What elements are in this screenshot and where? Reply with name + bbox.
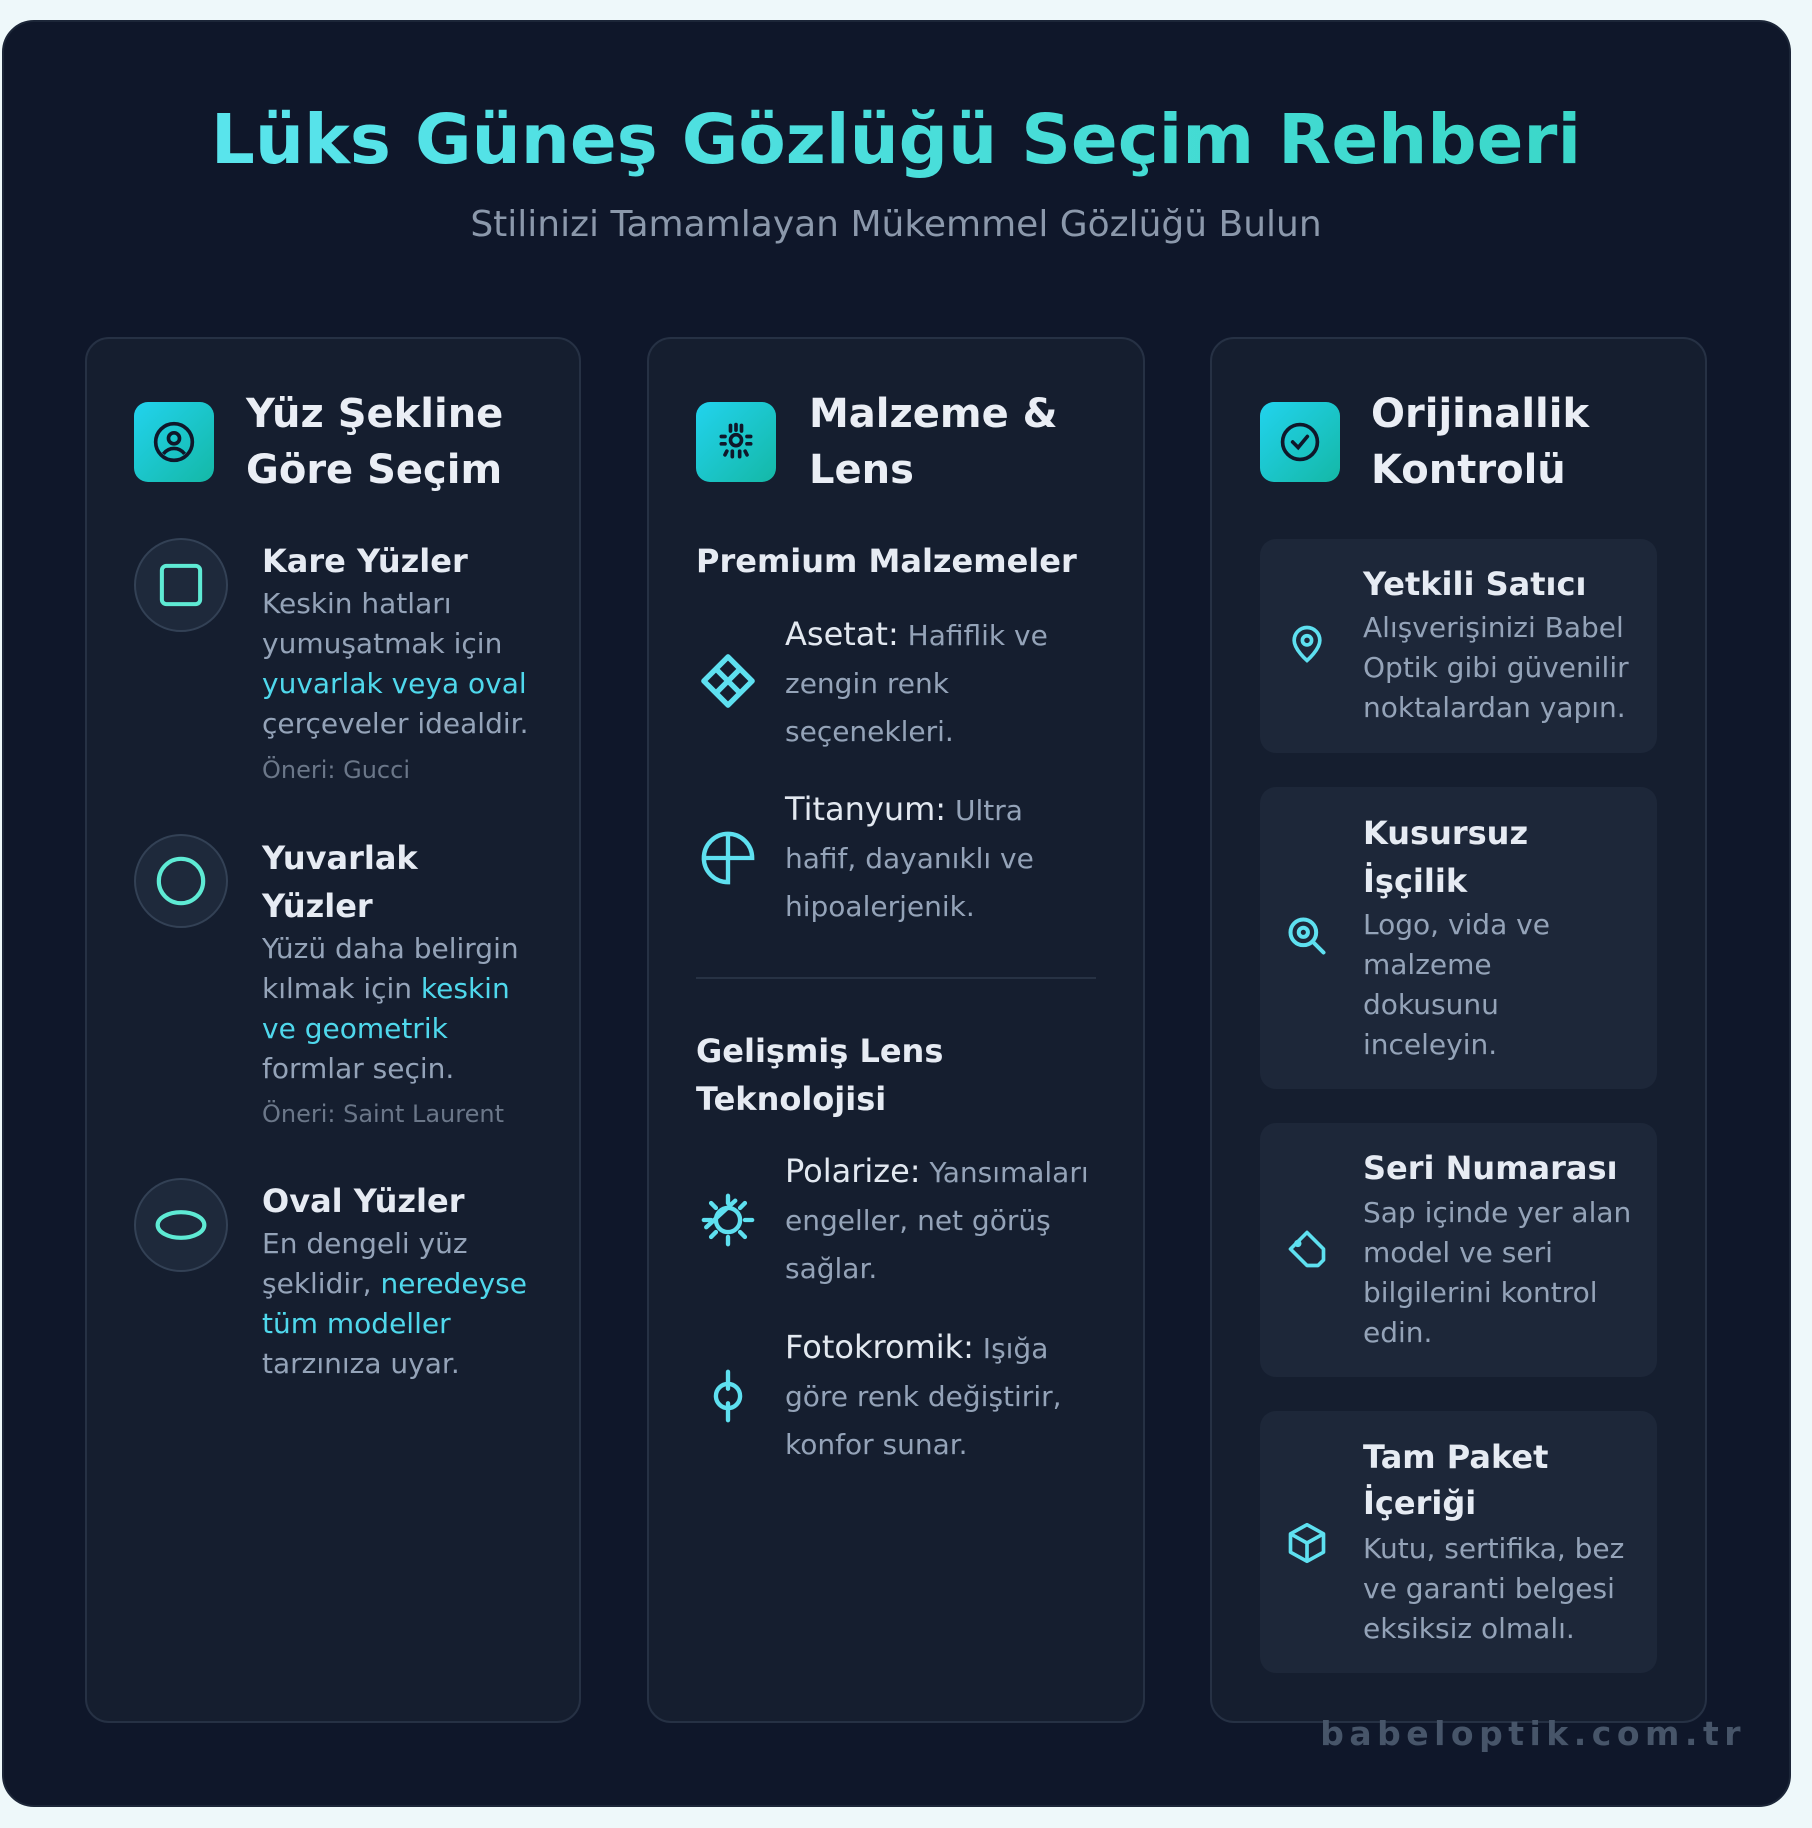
- card: authorized seller: Optik gibi güvenilir: [1363, 651, 1629, 684]
- item: round faces: kılmak için keskin: [262, 972, 510, 1005]
- item: titanium: hafif, dayanıklı ve: [785, 842, 1034, 875]
- icon: lens: [696, 402, 776, 482]
- icon: face: [134, 402, 214, 482]
- item: titanium: [784, 790, 1034, 923]
- icon: check: [1260, 402, 1340, 482]
- item: polarized: Polarize: Yansımaları: [785, 1152, 1089, 1190]
- subheading: premium materials: Premium Malzemeler: [696, 542, 1077, 580]
- panel: authenticity: [1210, 337, 1707, 1723]
- watermark: babeloptik.com.tr: [1320, 1714, 1746, 1753]
- card: authorized seller: noktalardan yapın.: [1363, 691, 1626, 724]
- item: square faces: yumuşatmak için: [262, 627, 502, 660]
- item: square faces: Keskin hatları: [262, 587, 452, 620]
- heading: authenticity: [1371, 391, 1590, 493]
- item: square faces: yuvarlak veya oval: [262, 667, 527, 700]
- item: oval faces: [262, 1182, 527, 1380]
- icon: box: [1288, 1522, 1326, 1564]
- item: acetate: zengin renk: [785, 667, 949, 700]
- item: round faces: ve geometrik: [262, 1012, 448, 1045]
- item: round faces: [262, 839, 519, 1128]
- card: full package: Tam Paket: [1363, 1438, 1548, 1476]
- icon: titanium: [702, 832, 754, 884]
- item: oval faces: şeklidir, neredeyse: [262, 1267, 527, 1300]
- item: photochromic: göre renk değiştirir,: [785, 1380, 1062, 1413]
- heading: face shape: Göre Seçim: [246, 447, 502, 493]
- card: full package: Kutu, sertifika, bez: [1363, 1532, 1624, 1565]
- item: square faces: [262, 542, 528, 784]
- heading: materials: Lens: [809, 447, 914, 493]
- card: full package: İçeriği: [1363, 1484, 1476, 1522]
- item: acetate: seçenekleri.: [785, 715, 954, 748]
- card: full package: ve garanti belgesi: [1363, 1572, 1615, 1605]
- item: polarized: engeller, net görüş: [785, 1204, 1051, 1237]
- item: round faces: Yüzü daha belirgin: [262, 932, 519, 965]
- item: photochromic: konfor sunar.: [785, 1428, 968, 1461]
- icon: oval: [134, 1178, 228, 1272]
- heading: face shape: Yüz Şekline: [246, 391, 503, 437]
- card: serial number: Sap içinde yer alan: [1363, 1196, 1631, 1229]
- item: round faces: Yuvarlak: [262, 839, 418, 877]
- icon: acetate: [701, 654, 755, 708]
- item: square faces: çerçeveler idealdir.: [262, 707, 528, 740]
- heading: face shape: [246, 391, 503, 493]
- card: authorized seller: Yetkili Satıcı: [1363, 565, 1586, 603]
- heading: materials: Malzeme &: [809, 391, 1058, 437]
- item: acetate: [785, 615, 1048, 748]
- item: round faces: Öneri: Saint Laurent: [262, 1100, 504, 1128]
- item: polarized: sağlar.: [785, 1252, 877, 1285]
- heading: materials: [809, 391, 1058, 493]
- card: authorized seller: Alışverişinizi Babel: [1363, 611, 1624, 644]
- icon: circle: [134, 834, 228, 928]
- heading: authenticity: Kontrolü: [1371, 447, 1566, 493]
- subheading: lens tech: [696, 1032, 943, 1118]
- icon: square: [134, 538, 228, 632]
- subheading: lens tech: Gelişmiş Lens: [696, 1032, 943, 1070]
- card: serial number: [1260, 1123, 1657, 1377]
- card: full package: [1260, 1411, 1657, 1673]
- card: serial number: bilgilerini kontrol: [1363, 1276, 1598, 1309]
- icon: polarized: [702, 1194, 754, 1246]
- heading: authenticity: Orijinallik: [1371, 391, 1589, 437]
- item: photochromic: Fotokromik: Işığa: [785, 1328, 1048, 1366]
- icon: photochromic: [714, 1370, 742, 1422]
- item: square faces: Öneri: Gucci: [262, 756, 410, 784]
- subheading: lens tech: Teknolojisi: [696, 1080, 886, 1118]
- item: oval faces: En dengeli yüz: [262, 1227, 468, 1260]
- card: serial number: Seri Numarası: [1363, 1149, 1618, 1187]
- title: Lüks Güneş Gözlüğü Seçim Rehberi: [211, 100, 1581, 180]
- item: oval faces: Oval Yüzler: [262, 1182, 464, 1220]
- card: full package: eksiksiz olmalı.: [1363, 1612, 1575, 1645]
- item: round faces: formlar seçin.: [262, 1052, 454, 1085]
- card: craftsmanship: Kusursuz: [1363, 814, 1528, 852]
- item: acetate: Asetat: Hafiflik ve: [785, 615, 1048, 653]
- subtitle: Stilinizi Tamamlayan Mükemmel Gözlüğü Bulun: [470, 204, 1322, 245]
- item: titanium: Titanyum: Ultra: [785, 790, 1023, 828]
- card: craftsmanship: [1260, 787, 1657, 1089]
- panel: face shape: [85, 337, 581, 1723]
- item: round faces: Yüzler: [262, 887, 373, 925]
- item: oval faces: tarzınıza uyar.: [262, 1347, 460, 1380]
- item: polarized: [785, 1152, 1089, 1285]
- icon: tag: [1288, 1230, 1326, 1268]
- card: authorized seller: [1260, 539, 1657, 753]
- item: oval faces: tüm modeller: [262, 1307, 451, 1340]
- card: craftsmanship: Logo, vida ve: [1363, 908, 1550, 941]
- item: photochromic: [785, 1328, 1062, 1461]
- card: serial number: edin.: [1363, 1316, 1432, 1349]
- card: serial number: model ve seri: [1363, 1236, 1553, 1269]
- icon: magnifier: [1288, 918, 1326, 955]
- card: craftsmanship: malzeme: [1363, 948, 1492, 981]
- card: craftsmanship: İşçilik: [1363, 862, 1467, 900]
- icon: pin: [1292, 626, 1322, 663]
- card: craftsmanship: inceleyin.: [1363, 1028, 1497, 1061]
- panel: materials: [647, 337, 1145, 1723]
- item: square faces: Kare Yüzler: [262, 542, 468, 580]
- item: titanium: hipoalerjenik.: [785, 890, 975, 923]
- card: craftsmanship: dokusunu: [1363, 988, 1499, 1021]
